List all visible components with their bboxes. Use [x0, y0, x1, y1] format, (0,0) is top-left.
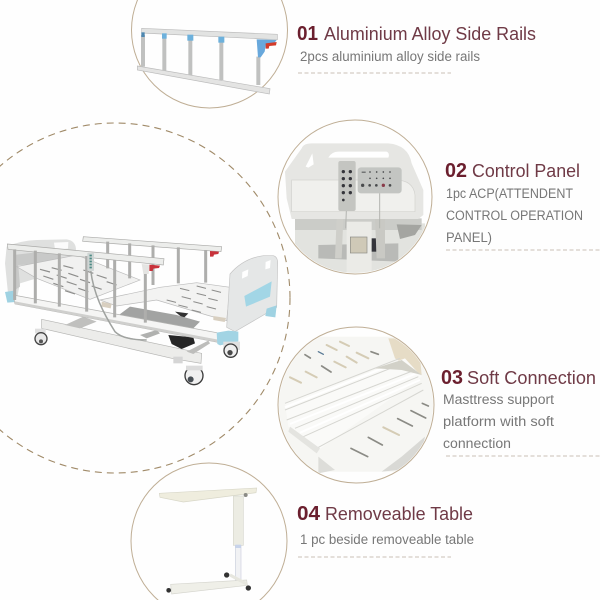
near side rail: [7, 244, 164, 323]
description 04: 1 pc beside removeable table: [300, 532, 474, 547]
heading 04: Removeable Table: [325, 504, 473, 524]
description 02: [446, 186, 583, 245]
mattress platform foot section: [100, 283, 230, 322]
heading 03: Soft Connection: [467, 368, 596, 388]
feature 04 text block: [297, 503, 474, 557]
near headboard: [227, 256, 278, 332]
detail 04 circle: removeable table: [131, 463, 287, 600]
description 03: Masttress support: [443, 392, 554, 407]
description 01: 2pcs aluminium alloy side rails: [300, 49, 480, 64]
photo: platform soft connection: [275, 337, 442, 473]
circle outline: [278, 327, 434, 483]
feature 02 text block: [445, 160, 600, 250]
circle outline: [132, 0, 288, 108]
description 02: PANEL): [446, 230, 492, 245]
detail 02 circle: control panel: [278, 120, 432, 275]
far side rail: [83, 237, 222, 285]
main bed illustration: [5, 237, 278, 385]
circle outline: [131, 463, 287, 600]
heading 02: 02: [445, 160, 467, 182]
detail 01 circle: side rails: [132, 0, 288, 108]
far headboard: [5, 239, 76, 303]
mattress platform head section: [17, 255, 140, 299]
photo: control panels on bed side: [285, 143, 425, 275]
dashed circle around main bed: [0, 123, 290, 473]
hand control: [87, 253, 94, 271]
detail 03 circle: soft connection: [275, 327, 442, 483]
blue corner bracket: [217, 331, 238, 345]
icon: overbed table: [159, 488, 257, 594]
description 03: [443, 392, 554, 451]
description 03: platform with soft: [443, 414, 554, 429]
heading 01: 01: [297, 23, 318, 45]
base frame: [42, 307, 210, 363]
feature 01 text block: [297, 23, 536, 73]
description 03: connection: [443, 436, 511, 451]
icon: side rail: [137, 28, 277, 94]
heading 03: 03: [441, 367, 463, 389]
heading 02: Control Panel: [472, 161, 580, 181]
side frame beam: [13, 295, 220, 343]
heading 01: Aluminium Alloy Side Rails: [324, 24, 536, 44]
heading 04: 04: [297, 503, 321, 525]
caster wheels: [35, 329, 240, 385]
attendant control panel: [358, 167, 402, 228]
hand pendant: [338, 161, 356, 228]
circle outline: [278, 120, 432, 274]
description 02: CONTROL OPERATION: [446, 208, 583, 223]
control cable: [91, 270, 147, 340]
description 02: 1pc ACP(ATTENDENT: [446, 186, 573, 201]
feature 03 text block: [441, 367, 600, 456]
